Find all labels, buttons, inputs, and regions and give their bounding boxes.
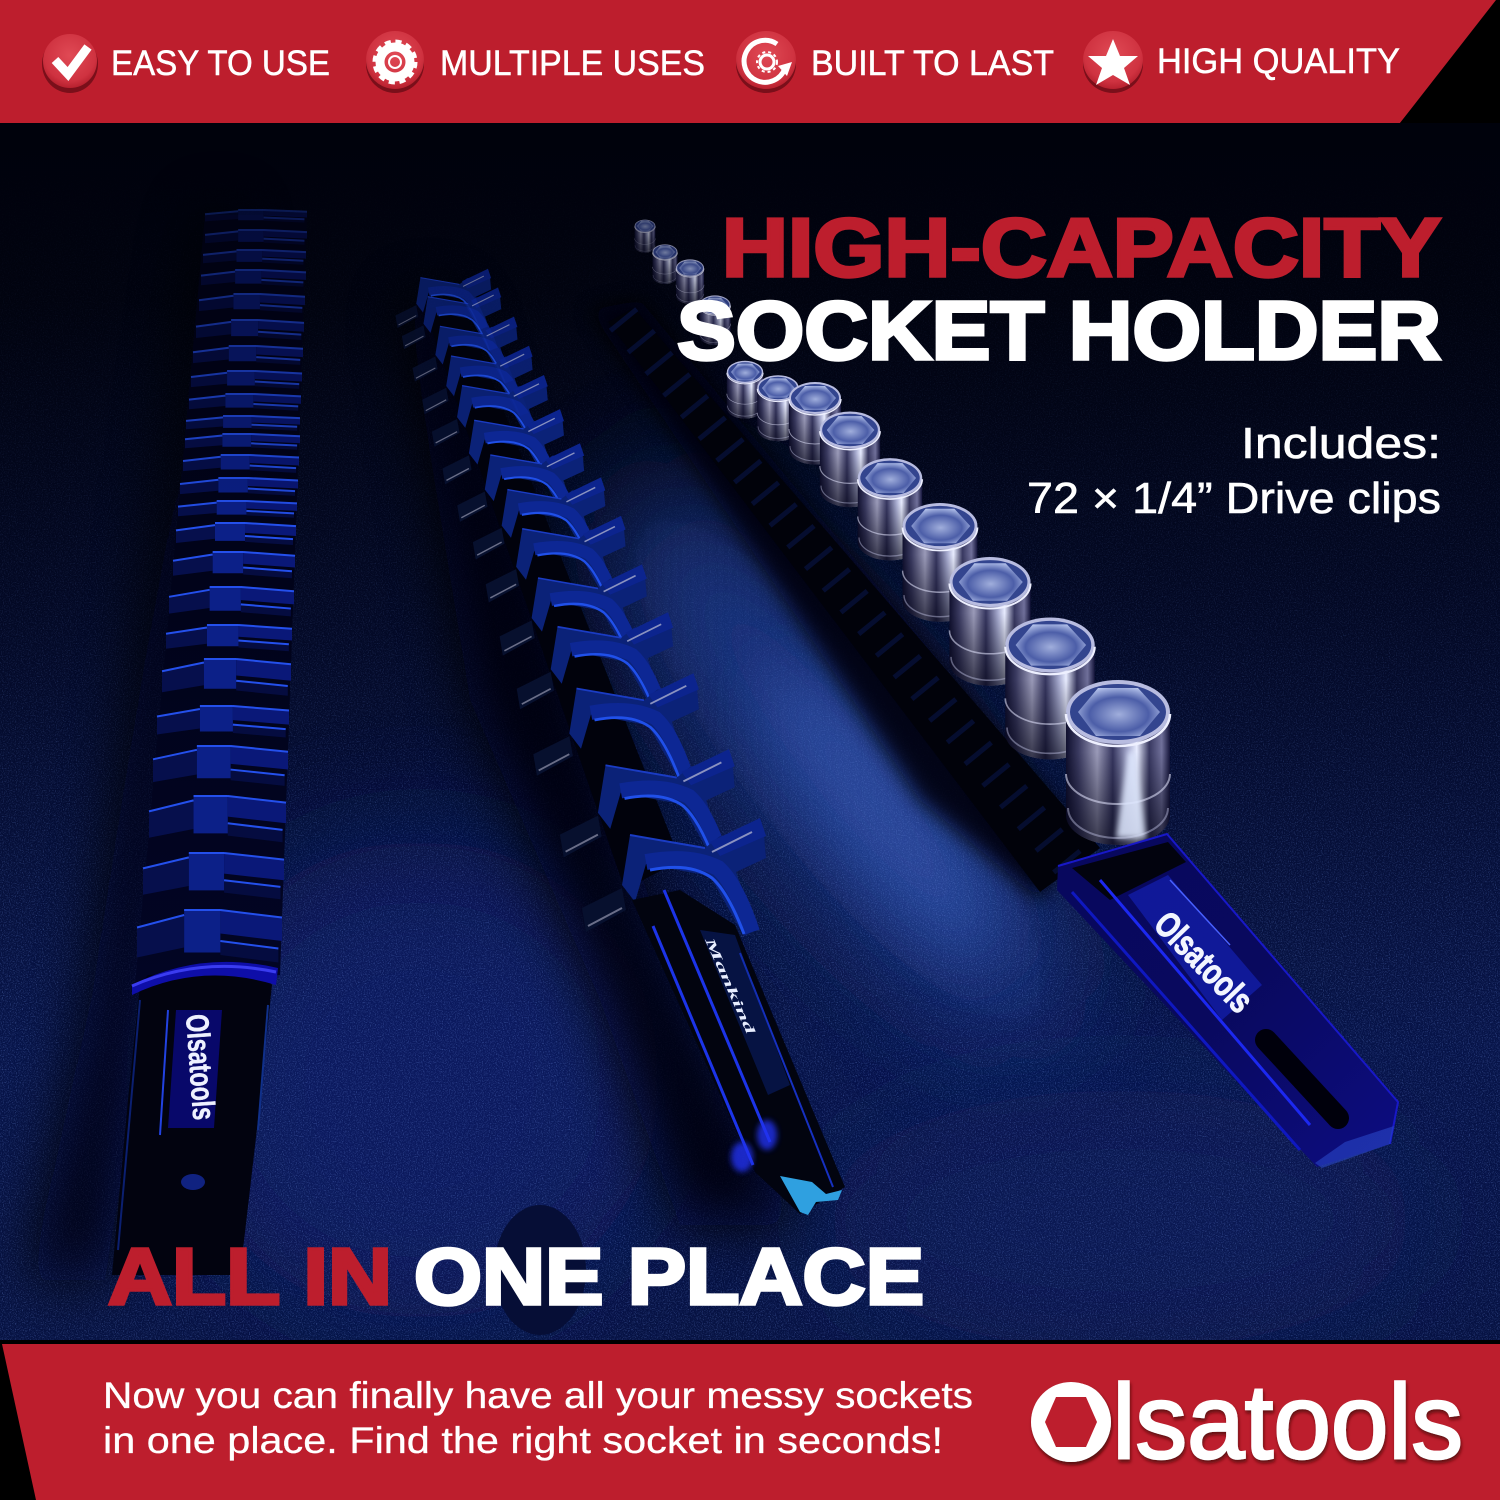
headline: all in one place: ONE PLACE bbox=[414, 1232, 924, 1321]
banner description: in one place. Find the right socket in seconds! bbox=[103, 1420, 943, 1461]
right socket rail with sockets bbox=[608, 220, 1398, 1168]
middle socket rail bbox=[395, 269, 845, 1215]
dark knob near bottom bbox=[494, 1205, 586, 1335]
socket glint bbox=[1116, 752, 1146, 838]
middle rail plate bbox=[632, 890, 845, 1215]
rail spine bbox=[135, 215, 307, 985]
feature: multiple uses: MULTIPLE USES bbox=[440, 44, 705, 83]
title line: high-capacity: HIGH-CAPACITY bbox=[722, 201, 1441, 294]
left rail logo: Olsatools bbox=[179, 1013, 222, 1121]
rail spine bbox=[425, 300, 680, 890]
includes text: 72 × 1/4” Drive clips bbox=[1027, 474, 1441, 523]
feature: easy to use: EASY TO USE bbox=[111, 44, 330, 83]
middle rail signature: Mankind bbox=[701, 933, 759, 1037]
feature: high quality: HIGH QUALITY bbox=[1157, 42, 1400, 81]
rail clips bbox=[395, 269, 766, 936]
icon: star badge bbox=[1083, 31, 1143, 93]
feature: built to last: BUILT TO LAST bbox=[811, 44, 1054, 83]
shadows under the rails bbox=[30, 210, 1080, 1280]
banner description bbox=[103, 1375, 973, 1461]
right rail plate bbox=[1057, 834, 1398, 1168]
headline: all in one place bbox=[108, 1232, 924, 1321]
brand logo: Olsatools bbox=[1032, 1363, 1463, 1481]
banner description: Now you can finally have all your messy sockets bbox=[103, 1375, 973, 1416]
includes text bbox=[1027, 419, 1441, 523]
icon: check badge bbox=[42, 34, 98, 93]
left socket rail bbox=[112, 210, 307, 1275]
icon: refresh gear badge bbox=[736, 31, 796, 93]
title bbox=[677, 201, 1441, 377]
left rail plate bbox=[112, 962, 278, 1275]
rail clips bbox=[137, 210, 307, 962]
top banner bbox=[0, 0, 1500, 123]
headline: all in one place: ALL IN bbox=[108, 1232, 392, 1321]
title line: socket holder: SOCKET HOLDER bbox=[677, 284, 1441, 377]
right rail logo: Olsatools bbox=[1146, 903, 1262, 1021]
sockets bbox=[635, 220, 1170, 845]
rail spine bbox=[608, 308, 1100, 892]
includes text: Includes: bbox=[1241, 419, 1441, 468]
bottom banner bbox=[0, 1340, 1500, 1500]
icon: gear badge bbox=[366, 31, 424, 93]
